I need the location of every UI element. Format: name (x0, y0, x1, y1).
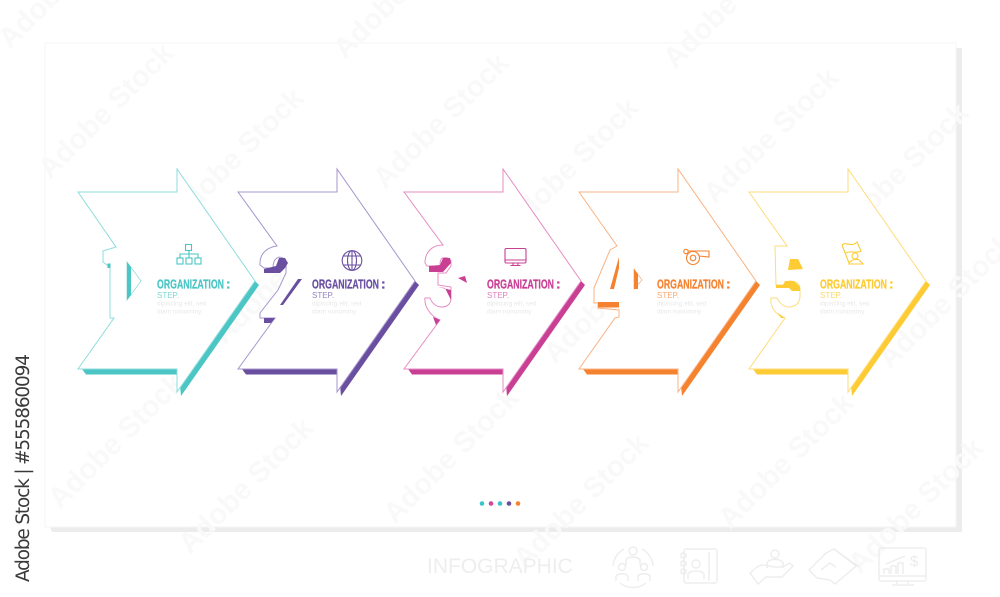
icon: hand with person (750, 550, 793, 584)
numeral 4 fragments (634, 269, 642, 289)
watermarks: Adobe Stock (207, 201, 356, 350)
text 3: ORGANIZATION (487, 276, 554, 292)
text 3: dipiscing elit, sed (487, 300, 537, 308)
text 5: diam nonummy (820, 308, 865, 316)
text 3 (487, 276, 561, 316)
text 5: ORGANIZATION (820, 276, 887, 292)
watermarks: Adobe Stock (377, 381, 526, 530)
text 4 (657, 276, 731, 316)
text 4: : (726, 276, 731, 292)
footer label: INFOGRAPHIC (427, 555, 573, 578)
numeral 5 fragments (776, 259, 803, 318)
watermarks: Adobe Stock (367, 46, 516, 195)
arrow 5 (749, 169, 930, 396)
stock id: Adobe Stock | #555860094 (13, 354, 34, 582)
outline 5 (749, 169, 926, 392)
icon: hierarchy (177, 244, 201, 264)
outline 1 (78, 169, 255, 392)
icon: address book (681, 549, 717, 583)
watermarks: Adobe Stock (507, 426, 656, 575)
arrow 2 (238, 169, 419, 396)
icon: handing banknote (809, 549, 859, 584)
outline 4 (579, 169, 756, 392)
shadow band 2 (242, 281, 419, 396)
shadow band 3 (408, 281, 585, 396)
arrow 4 (579, 169, 760, 396)
text 4: ORGANIZATION (657, 276, 724, 292)
text 2 (312, 276, 386, 316)
text 1: ORGANIZATION (157, 276, 224, 292)
icon: monitor (505, 248, 526, 266)
text 5: dipiscing elit, sed (820, 300, 870, 308)
shadow band 5 (753, 281, 930, 396)
text 4: STEP. (657, 291, 679, 300)
outline 3 (404, 169, 581, 392)
watermarks: Adobe Stock (697, 61, 846, 210)
watermarks: Adobe Stock (162, 81, 311, 230)
shadow band 1 (82, 281, 259, 396)
text 1: dipiscing elit, sed (157, 300, 207, 308)
watermarks: Adobe Stock (842, 431, 991, 580)
shadow band 4 (583, 281, 760, 396)
outline 2 (238, 169, 415, 392)
icon: chart monitor (879, 548, 926, 585)
icon: whistle (684, 249, 709, 264)
text 2: : (381, 276, 386, 292)
numeral 2 fragments (264, 258, 302, 323)
text 2: dipiscing elit, sed (312, 300, 362, 308)
text 1: : (226, 276, 231, 292)
arrow 1 (78, 169, 259, 396)
text 5: : (889, 276, 894, 292)
text 5: STEP. (820, 291, 842, 300)
watermarks: Adobe Stock (32, 36, 181, 185)
icon: chart monitor: $ (910, 553, 919, 570)
text 3: STEP. (487, 291, 509, 300)
panel shadow (50, 48, 962, 532)
watermarks: Adobe Stock (172, 411, 321, 560)
icon: flag and person (842, 242, 863, 264)
arrow 3 (404, 169, 585, 396)
watermarks: Adobe Stock (42, 366, 191, 515)
text 2: diam nonummy (312, 308, 357, 316)
watermarks: Adobe Stock (712, 386, 861, 535)
text 3: diam nonummy (487, 308, 532, 316)
text 2: ORGANIZATION (312, 276, 379, 292)
numeral 3 fragments (429, 258, 467, 325)
watermarks: Adobe Stock (827, 96, 976, 245)
icon: team cycle (613, 547, 653, 588)
text 1: STEP. (157, 291, 179, 300)
text 4: dipiscing elit, sed (657, 300, 707, 308)
text 2: STEP. (312, 291, 334, 300)
pagination dots (480, 501, 520, 506)
icon: globe (342, 251, 362, 270)
text 5 (820, 276, 894, 316)
watermarks: Adobe Stock (537, 221, 686, 370)
panel (45, 43, 956, 527)
watermarks: Adobe Stock (497, 91, 646, 240)
text 4: diam nonummy (657, 308, 702, 316)
text 1: diam nonummy (157, 308, 202, 316)
numeral 1 fragments (127, 262, 141, 300)
text 3: : (556, 276, 561, 292)
text 1 (157, 276, 231, 316)
